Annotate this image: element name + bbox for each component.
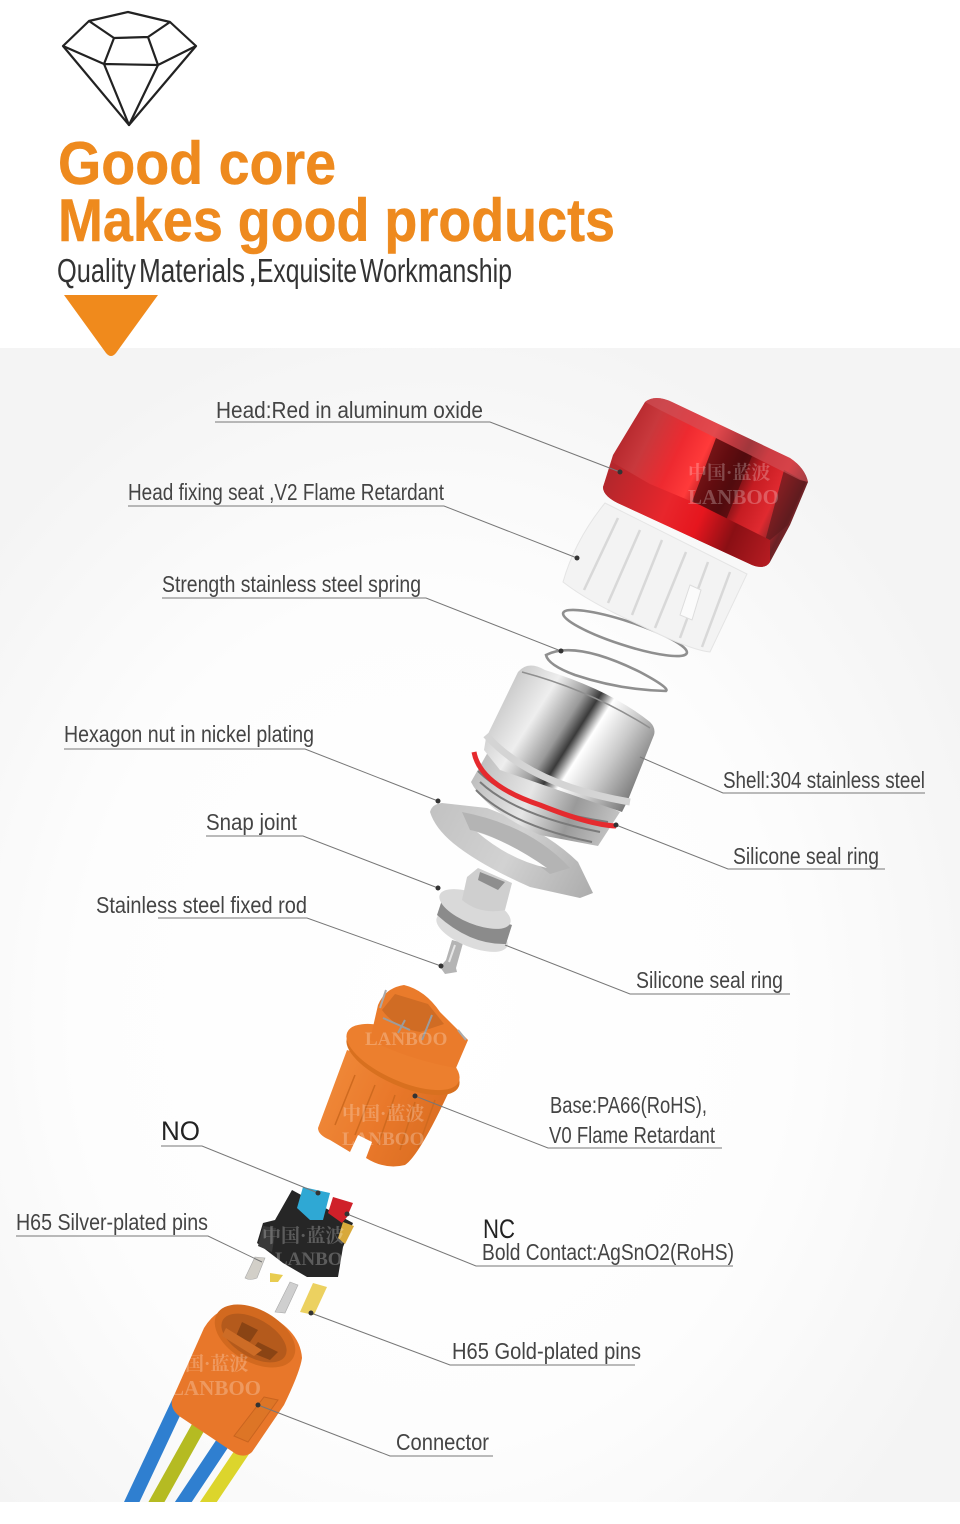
leader: snap joint (206, 836, 440, 890)
label: seal ring 1: Silicone seal ring (733, 843, 879, 869)
leader: seal ring 2 (505, 945, 790, 994)
label: head fixing seat: Head fixing seat ,V2 Flame Retardant (128, 479, 444, 505)
wires (128, 1395, 250, 1510)
subtitle: Quality (57, 252, 136, 289)
watermarks: 中国·蓝波 (342, 1102, 424, 1125)
part: head fixing seat (563, 503, 747, 652)
leader: connector (256, 1402, 493, 1456)
icon: diamond (63, 12, 196, 125)
label: connector: Connector (396, 1429, 489, 1455)
label: head: Head:Red in aluminum oxide (216, 397, 483, 423)
title: Good core (58, 130, 336, 197)
subtitle (57, 252, 512, 289)
leader: NO (161, 1146, 320, 1196)
title: Makes good products (58, 187, 615, 254)
leader: spring (162, 598, 564, 654)
label: fixed rod: Stainless steel fixed rod (96, 892, 307, 918)
watermarks: LANBOO (365, 1029, 447, 1050)
leader: NC (344, 1212, 733, 1266)
label: gold pins: H65 Gold-plated pins (452, 1338, 641, 1364)
subtitle: Materials (139, 252, 245, 289)
label: spring: Strength stainless steel spring (162, 571, 421, 597)
label: NC and contact (482, 1214, 734, 1265)
watermarks: LANBOO (170, 1376, 261, 1400)
label: seal ring 2: Silicone seal ring (636, 967, 783, 993)
leader: seal ring 1 (614, 822, 885, 869)
background panel (0, 348, 960, 1502)
part: red head (603, 398, 808, 567)
leader: base (412, 1094, 722, 1148)
watermarks: LANBOO (275, 1249, 357, 1270)
watermarks: LANBOO (342, 1129, 424, 1150)
leader: shell (640, 757, 925, 793)
label: hexagon nut: Hexagon nut in nickel plating (64, 721, 314, 747)
label: NO: NO (161, 1116, 200, 1146)
leader: silver pins (16, 1236, 262, 1262)
leader: hexagon nut (64, 749, 440, 804)
part: stainless fixed rod (440, 940, 463, 974)
part: connector (172, 1291, 306, 1456)
label: snap joint: Snap joint (206, 809, 298, 835)
leader: head fixing seat (128, 506, 580, 560)
watermarks (170, 461, 779, 1400)
watermarks: 中国·蓝波 (688, 461, 770, 484)
part: switch body (257, 1187, 354, 1277)
part: snap joint (431, 868, 516, 960)
label: base: Base:PA66(RoHS), (550, 1092, 707, 1118)
label: base (549, 1092, 715, 1148)
subtitle: Exquisite (257, 252, 357, 289)
red seal ring (474, 752, 616, 826)
watermarks: 国·蓝波 (185, 1352, 248, 1375)
label: NC and contact: NC (483, 1214, 515, 1244)
watermarks: LANBOO (688, 485, 779, 509)
subtitle: , (248, 252, 257, 289)
part: shell (471, 665, 654, 846)
leader: head (215, 422, 622, 474)
label: silver pins: H65 Silver-plated pins (16, 1209, 208, 1235)
part: hexagon nut (430, 803, 593, 898)
leader: fixed rod (158, 918, 444, 968)
part: switch pins (245, 1257, 327, 1315)
part: spring (546, 602, 691, 691)
label: NC and contact: Bold Contact:AgSnO2(RoHS) (482, 1239, 734, 1265)
label: base: V0 Flame Retardant (549, 1122, 715, 1148)
watermarks: 中国·蓝波 (262, 1224, 344, 1247)
title (58, 130, 615, 254)
part: base (318, 985, 468, 1166)
icon: orange down triangle (64, 295, 158, 356)
subtitle: Workmanship (360, 252, 512, 289)
leader: gold pins (308, 1310, 635, 1365)
